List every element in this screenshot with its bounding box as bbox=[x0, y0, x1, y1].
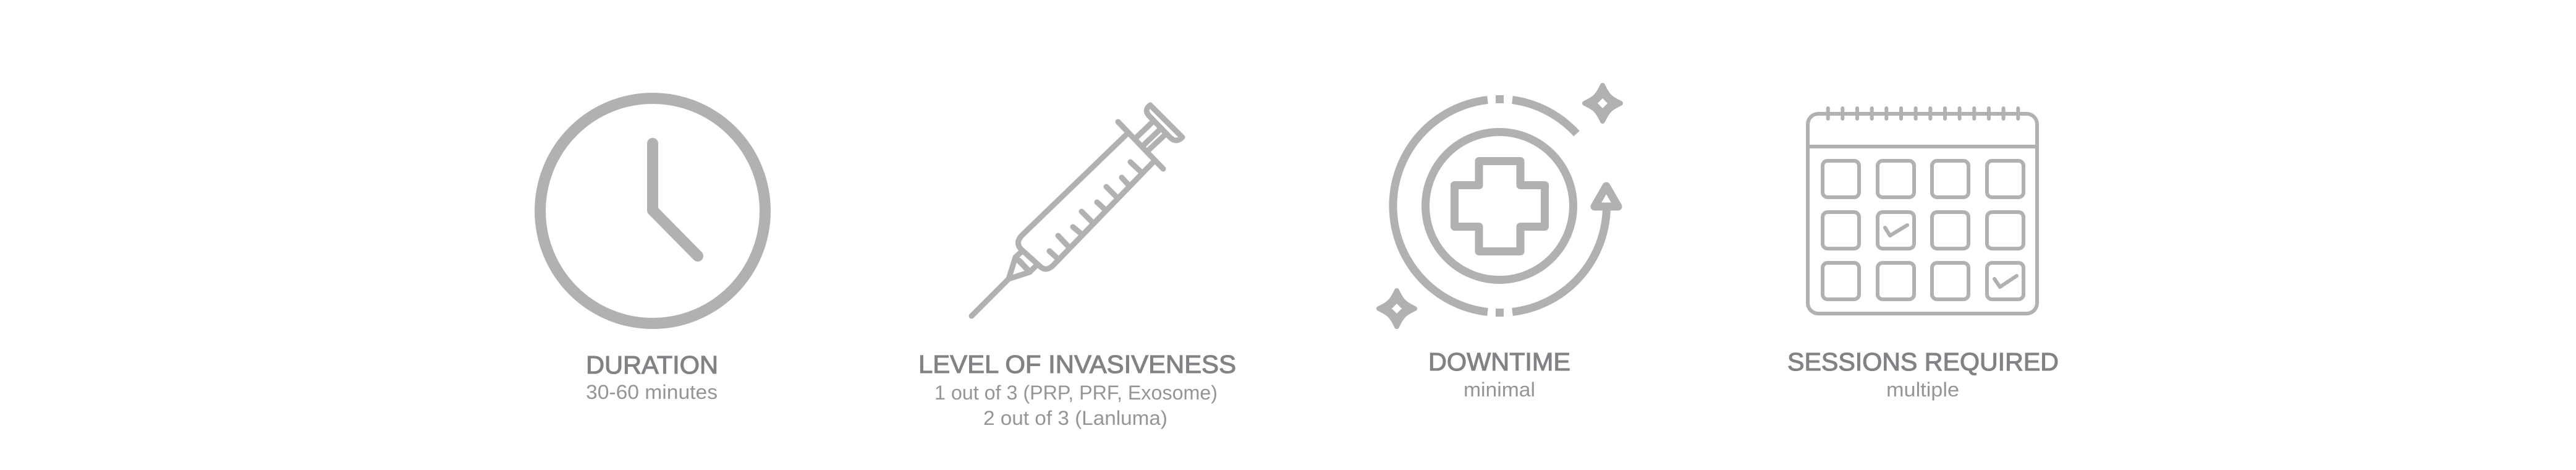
sparkle: bottom left bbox=[1379, 291, 1415, 327]
panel: level of invasiveness bbox=[918, 105, 1236, 429]
text: invasiveness line 1: 1 out of 3 (PRP, PRF, Exosome) bbox=[934, 382, 1218, 404]
icon: syringe bbox=[972, 105, 1182, 316]
panel: sessions required bbox=[1787, 108, 2059, 401]
heading: sessions required: SESSIONS REQUIRED bbox=[1787, 348, 2059, 376]
heading: level of invasiveness: LEVEL OF INVASIVENESS bbox=[918, 350, 1236, 378]
heading: downtime: DOWNTIME bbox=[1428, 348, 1570, 376]
icon: recovery cross bbox=[1379, 85, 1621, 327]
text: duration value: 30-60 minutes bbox=[586, 381, 718, 403]
panel: downtime bbox=[1379, 85, 1621, 401]
panel: duration bbox=[540, 98, 765, 403]
gap markers bbox=[1496, 95, 1504, 317]
heading: duration: DURATION bbox=[586, 351, 718, 379]
icon: calendar bbox=[1808, 108, 2037, 314]
outer arcs bbox=[1393, 100, 1618, 312]
icon: clock bbox=[540, 98, 765, 323]
text: invasiveness line 2: 2 out of 3 (Lanluma) bbox=[983, 407, 1167, 429]
sparkle: top right bbox=[1585, 85, 1621, 121]
text: sessions value: multiple bbox=[1886, 378, 1959, 401]
text: downtime value: minimal bbox=[1464, 378, 1535, 401]
